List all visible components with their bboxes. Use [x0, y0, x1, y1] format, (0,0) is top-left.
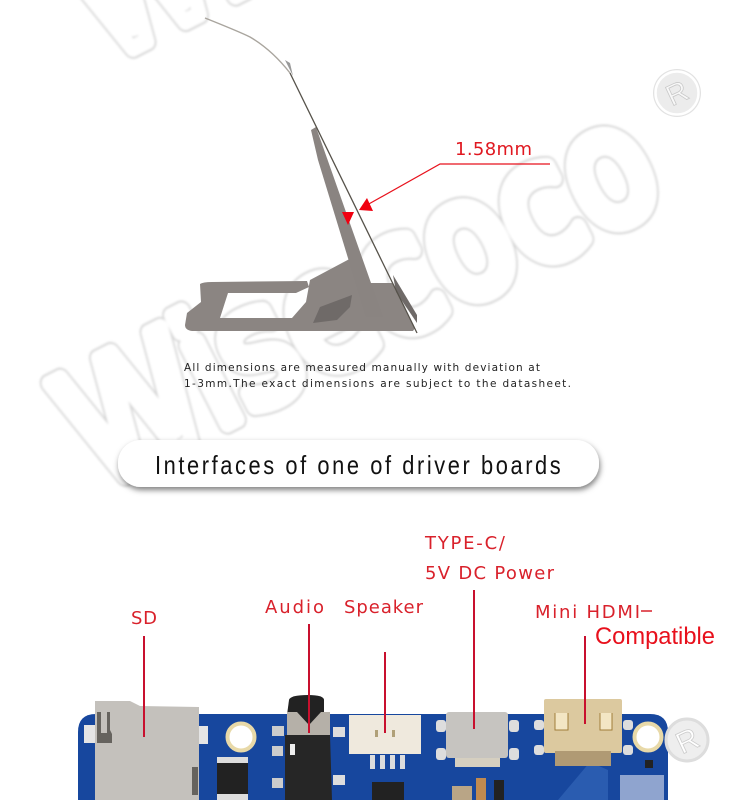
screen panel	[205, 18, 290, 73]
disclaimer note	[184, 362, 571, 390]
heading pill: Interfaces of one of driver boards	[155, 451, 561, 480]
dimension callout	[342, 139, 550, 225]
label: TYPE-C / 5V DC Power	[424, 533, 555, 729]
board pcb	[78, 714, 668, 800]
label: Mini HDMI-Compatible: Mini HDMI	[535, 602, 640, 623]
stand arm	[311, 127, 383, 317]
watermark: registered mark top	[653, 69, 701, 117]
mounting hole left	[228, 724, 254, 750]
disclaimer note: All dimensions are measured manually with deviation at	[184, 362, 540, 374]
label: Audio: Audio	[265, 597, 324, 618]
label: SD: SD	[131, 608, 157, 629]
IC chip	[217, 757, 248, 800]
label: Speaker	[344, 597, 424, 733]
arrowhead: outer	[359, 198, 373, 211]
small header pins	[620, 760, 664, 800]
USB-C port	[436, 712, 519, 800]
label: SD	[131, 608, 157, 737]
pcb trace patch	[558, 762, 608, 800]
watermark: registered mark top: R	[661, 75, 694, 113]
stand wing shadow	[313, 295, 352, 323]
arrowhead: inner	[342, 212, 354, 225]
label: 1.58mm: 1.58mm	[455, 139, 532, 160]
screen top corner	[285, 60, 293, 76]
speaker connector	[349, 715, 421, 800]
mounting hole right	[634, 724, 662, 750]
stand lip	[393, 275, 417, 323]
arrow: thickness line	[367, 164, 550, 205]
label: Mini HDMI-Compatible: Compatible	[595, 623, 715, 650]
label: TYPE-C / 5V DC Power: 5V DC Power	[425, 563, 555, 584]
audio jack	[272, 695, 345, 800]
SD card slot	[84, 701, 208, 800]
phone stand with screen	[185, 18, 417, 333]
label: TYPE-C / 5V DC Power: TYPE-C/	[424, 533, 506, 554]
screen edge	[290, 73, 417, 333]
heading pill	[118, 440, 599, 487]
disclaimer note: 1-3mm.The exact dimensions are subject to the datasheet.	[184, 378, 571, 390]
label: Audio	[265, 597, 324, 733]
label: Mini HDMI-Compatible	[535, 602, 715, 724]
watermark: registered mark bottom: R	[671, 722, 704, 761]
label: Speaker: Speaker	[344, 597, 424, 618]
stand base	[185, 255, 415, 331]
driver board	[78, 695, 668, 800]
mini HDMI port	[534, 699, 633, 766]
